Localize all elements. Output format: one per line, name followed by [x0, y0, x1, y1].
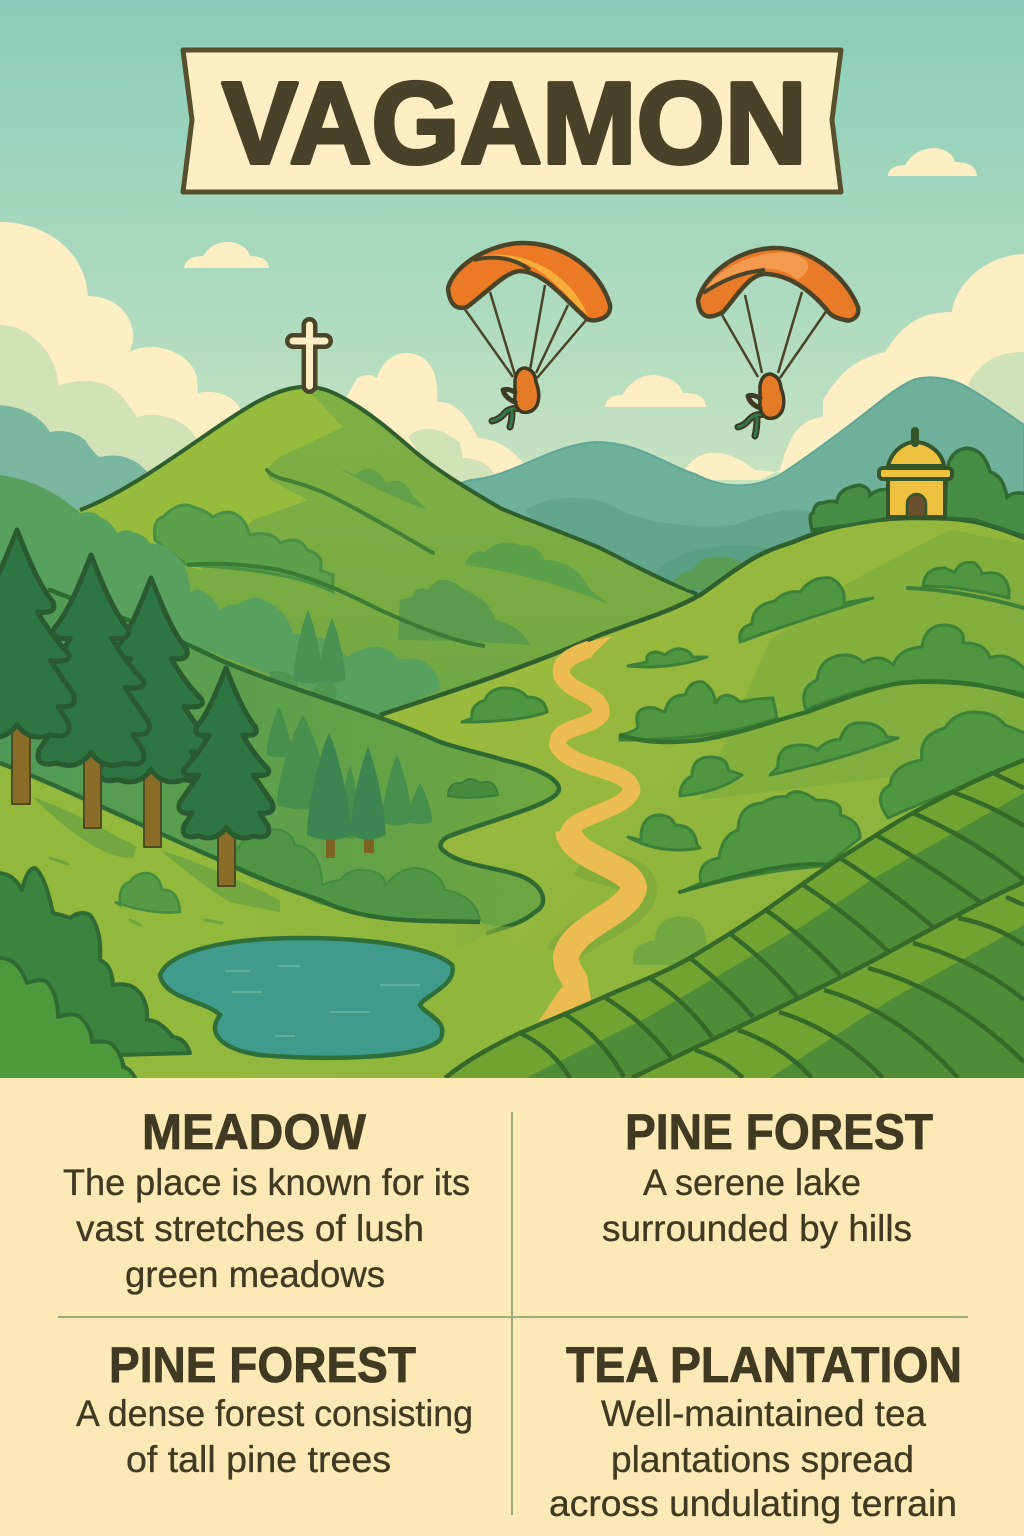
- lake: [160, 938, 453, 1058]
- firs on hill: [294, 610, 345, 684]
- hill outline: [380, 518, 1024, 715]
- bush C: [620, 682, 777, 740]
- canopy light panel: [706, 253, 808, 290]
- path upper: [558, 649, 632, 835]
- forest mass: [0, 475, 440, 716]
- bush L faded: [633, 916, 706, 965]
- bush I: [923, 562, 1009, 598]
- bush J: [628, 649, 707, 667]
- block: meadow: vast stretches of lush: [76, 1208, 424, 1249]
- upper hill rows: [520, 773, 1024, 1078]
- hill bush strip: [154, 505, 333, 592]
- block: pine forest: A dense forest consisting: [76, 1393, 473, 1434]
- valley body: [0, 560, 559, 960]
- block: pine forest: PINE FOREST: [109, 1337, 416, 1393]
- chapel finial: [911, 431, 919, 443]
- hill shade: [700, 530, 1024, 800]
- hill ridge two: [187, 564, 485, 646]
- block: meadow: The place is known for its: [63, 1162, 470, 1203]
- far mountains: [0, 377, 1024, 640]
- cloud: large right: [680, 254, 1024, 480]
- lower hill outline: [632, 882, 1024, 1078]
- bushes behind chapel: [810, 448, 1024, 538]
- back bush mass: [0, 868, 190, 1085]
- small fir with trunk: [307, 733, 351, 858]
- big left hill with cross: [0, 387, 745, 800]
- bush in valley: [448, 779, 498, 798]
- cloud: center shade: [408, 429, 497, 482]
- small fir with trunk two: [350, 747, 386, 853]
- pine 2: [33, 555, 149, 828]
- distant firs: [267, 707, 432, 838]
- bush small: [115, 873, 180, 913]
- lake ripples: [225, 966, 420, 1036]
- bush F: [628, 815, 700, 850]
- ridge bushes: [235, 829, 480, 922]
- pilot: [492, 368, 539, 427]
- block: meadow: green meadows: [125, 1254, 385, 1295]
- cloud: small top right: [888, 148, 977, 176]
- bush E: [680, 757, 742, 796]
- chapel door: [907, 494, 926, 517]
- tea plantation: [445, 760, 1024, 1080]
- block: tea plantation: TEA PLANTATION: [566, 1337, 962, 1393]
- chapel dome: [888, 442, 944, 466]
- lake water: [160, 938, 453, 1058]
- canopy: [448, 243, 610, 320]
- block: pine forest lake: PINE FOREST: [625, 1104, 933, 1160]
- sky background: [0, 0, 1024, 560]
- front left bushes: [0, 868, 190, 1085]
- path top taper: [584, 636, 612, 657]
- block: tea plantation: [549, 1337, 962, 1524]
- block: tea plantation: across undulating terrain: [549, 1483, 957, 1524]
- cross on hilltop: [293, 325, 325, 386]
- chapel cornice: [879, 468, 952, 479]
- block: pine forest lake: surrounded by hills: [602, 1208, 912, 1249]
- block: pine forest: of tall pine trees: [126, 1439, 391, 1480]
- panel dividers: [58, 1112, 968, 1515]
- hill body: [380, 518, 1024, 1080]
- ridge line I: [908, 588, 1024, 608]
- lines: [722, 292, 827, 378]
- pine 4: [179, 668, 273, 886]
- path shadow: [562, 860, 640, 955]
- bush A: [740, 578, 873, 642]
- ridge line: [0, 763, 480, 922]
- bush M: [462, 688, 547, 722]
- hill contour: [267, 470, 433, 553]
- paraglider right: [698, 248, 858, 436]
- pilot: [738, 374, 784, 436]
- upper hill shade band: [526, 793, 1024, 1078]
- bush D: [770, 723, 898, 775]
- path lower: [566, 830, 634, 990]
- ridge line B: [620, 681, 1024, 742]
- pine 1: [0, 530, 74, 804]
- lower hill rows: [695, 897, 1024, 1078]
- clouds: [0, 148, 1024, 490]
- right hill meadow: [380, 518, 1024, 1080]
- grass dashes: [50, 858, 222, 925]
- chapel on right hill: [810, 431, 1024, 538]
- tree shadows: [33, 797, 280, 912]
- block: meadow: MEADOW: [142, 1104, 367, 1160]
- hill bush right: [465, 543, 610, 605]
- upper hill outline: [445, 760, 1024, 1078]
- pine 3: [95, 578, 207, 847]
- mountain: middle ridge: [525, 497, 830, 610]
- path bottom taper: [538, 988, 592, 1022]
- front bush mass: [0, 958, 138, 1085]
- cloud: large left: [0, 222, 243, 480]
- ridge line: [50, 590, 559, 933]
- block: tea plantation: plantations spread: [611, 1439, 914, 1480]
- paraglider left: [448, 243, 610, 427]
- meadow body: [0, 763, 560, 1080]
- title text: VAGAMON: [222, 58, 807, 188]
- block: tea plantation: Well-maintained tea: [601, 1393, 926, 1434]
- panel background: [0, 1078, 1024, 1536]
- canopy seam: [474, 258, 530, 270]
- block: pine forest lake: A serene lake: [643, 1162, 861, 1203]
- left valley with ridges: [0, 560, 559, 960]
- lines: [464, 285, 587, 378]
- meadow bushes: [462, 562, 1024, 892]
- info panel: [0, 1078, 1024, 1536]
- canopy seam: [703, 270, 765, 293]
- left background forest: [0, 475, 440, 716]
- hill outline: [80, 387, 697, 594]
- chapel wall: [888, 478, 945, 517]
- title banner: [183, 50, 841, 192]
- upper terrace hill: [445, 760, 1024, 1080]
- lower hill shade band: [770, 925, 1024, 1080]
- cloud: right shade: [968, 352, 1024, 425]
- cloud: small center: [605, 375, 706, 407]
- pine trees: [0, 530, 273, 886]
- ridge line G: [680, 864, 830, 892]
- hill light patch: [70, 389, 343, 570]
- lower left meadow: [0, 763, 560, 1080]
- banner shape: [183, 50, 841, 192]
- mountain: far left: [0, 405, 150, 530]
- forest bushes mid: [270, 671, 337, 700]
- mountain: near ridge: [640, 545, 790, 600]
- canopy: [698, 248, 858, 320]
- winding path: [538, 636, 640, 1022]
- bush H: [880, 712, 1024, 818]
- cloud: large left shade: [0, 325, 200, 480]
- hill bush lower: [398, 580, 530, 645]
- bush behind right hill: [673, 557, 745, 590]
- cloud: center behind hill: [345, 353, 535, 490]
- block: meadow: [63, 1104, 470, 1295]
- cloud: small left: [184, 242, 269, 268]
- block: pine forest: [76, 1337, 473, 1480]
- bush B: [804, 625, 1024, 710]
- lower terrace hill: [632, 882, 1024, 1080]
- block: pine forest lake: [602, 1104, 933, 1249]
- bush G: [680, 792, 860, 892]
- hill body: [0, 387, 697, 800]
- faded bush: [337, 467, 427, 510]
- mountain: far right ridge: [440, 377, 1024, 640]
- canopy stripe: [482, 255, 587, 315]
